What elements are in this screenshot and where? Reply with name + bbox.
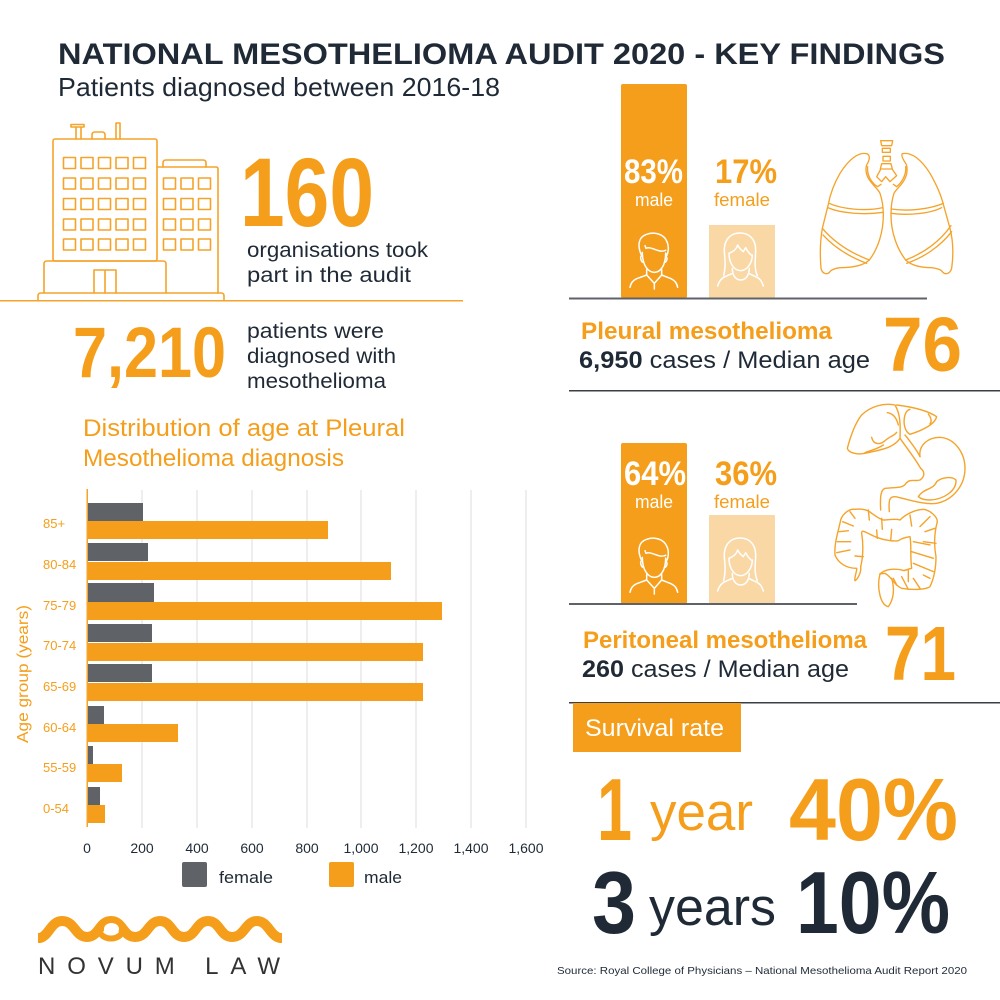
chart heading: Mesothelioma diagnosis (83, 445, 344, 472)
bar chart: age distribution: Age group (years) (15, 605, 32, 743)
chart heading (83, 415, 405, 472)
bar chart: age distribution: 85+ (43, 516, 65, 531)
survival heading (573, 703, 741, 752)
male bar 64%: 64% (624, 455, 686, 493)
bar chart: age distribution: 600 (240, 840, 264, 856)
stat: 160 organisations (240, 138, 429, 287)
bar chart: age distribution: 0-54 (43, 801, 69, 816)
peritoneal heading and cases (582, 627, 868, 683)
bar chart: age distribution: 1,000 (343, 840, 379, 856)
chart legend (182, 862, 402, 887)
median age 71: 71 (885, 611, 956, 697)
1 year 40%: 40% (789, 760, 958, 859)
male bar 64% (621, 443, 687, 604)
female bar 17% (709, 153, 777, 298)
pleural heading and cases: Pleural mesothelioma (581, 318, 833, 345)
logo: Novum Law (38, 920, 282, 980)
pleural heading and cases (579, 318, 870, 374)
bar chart: age distribution: 800 (295, 840, 319, 856)
stat: 7,210 patients: 7,210 (73, 314, 226, 393)
male bar 83% (621, 84, 687, 298)
subtitle: Patients diagnosed between 2016-18 (58, 72, 500, 102)
male bar 64%: male (635, 491, 673, 512)
bar chart: age distribution: 65-69 (43, 679, 76, 694)
1 year 40%: 1 (597, 760, 632, 859)
chart legend: female (219, 868, 273, 887)
bar chart: age distribution (15, 489, 544, 856)
bar chart: age distribution: 1,200 (398, 840, 434, 856)
panel: peritoneal mesothelioma (569, 404, 965, 697)
peritoneal heading and cases: 260 cases / Median age (582, 656, 849, 683)
logo: Novum Law: NOVUM LAW (38, 953, 280, 980)
3 years 10%: years (649, 878, 776, 937)
3 years 10%: 3 (592, 853, 636, 952)
male bar 83%: 83% (624, 153, 683, 191)
panel: survival rate (573, 703, 958, 952)
chart heading: Distribution of age at Pleural (83, 415, 405, 442)
stat: 7,210 patients: mesothelioma (247, 370, 386, 393)
pleural heading and cases: 6,950 cases / Median age (579, 347, 870, 374)
icon: hospital building (38, 123, 224, 300)
stat: 7,210 patients: diagnosed with (247, 345, 396, 368)
stat: 160 organisations: 160 (240, 138, 374, 247)
3 years 10% (592, 853, 950, 952)
panel: pleural mesothelioma (569, 84, 962, 388)
bar chart: age distribution: 55-59 (43, 760, 76, 775)
stat: 160 organisations: organisations took (247, 239, 429, 262)
peritoneal heading and cases: Peritoneal mesothelioma (583, 627, 868, 654)
bar chart: age distribution: 1,400 (453, 840, 489, 856)
female bar 36%: 36% (715, 455, 777, 493)
bar chart: age distribution: 400 (185, 840, 209, 856)
bar chart: age distribution: 60-64 (43, 720, 76, 735)
1 year 40%: year (650, 783, 753, 842)
bar chart: age distribution: 75-79 (43, 598, 76, 613)
bar chart: age distribution: 70-74 (43, 638, 76, 653)
title: NATIONAL MESOTHELIOMA AUDIT 2020 - KEY FINDINGS (58, 38, 945, 71)
female bar 36% (709, 455, 777, 604)
female bar 17%: 17% (715, 153, 777, 191)
female bar 36%: female (714, 491, 770, 512)
icon: digestive system (835, 404, 965, 607)
stat: 7,210 patients: patients were (247, 320, 384, 343)
survival heading: Survival rate (585, 715, 724, 742)
stat: 7,210 patients (73, 314, 396, 393)
3 years 10%: 10% (796, 853, 950, 952)
icon: lungs (820, 141, 953, 274)
median age 76: 76 (883, 302, 962, 388)
1 year 40% (597, 760, 958, 859)
chart legend: male (364, 868, 402, 887)
bar chart: age distribution: 0 (83, 840, 91, 856)
female bar 17%: female (714, 189, 770, 210)
male bar 83%: male (635, 189, 673, 210)
bar chart: age distribution: 200 (130, 840, 154, 856)
stat: 160 organisations: part in the audit (247, 264, 411, 287)
source note: Source: Royal College of Physicians – National Mesothelioma Audit Report 2020 (557, 965, 967, 977)
bar chart: age distribution: 80-84 (43, 557, 76, 572)
bar chart: age distribution: 1,600 (508, 840, 544, 856)
